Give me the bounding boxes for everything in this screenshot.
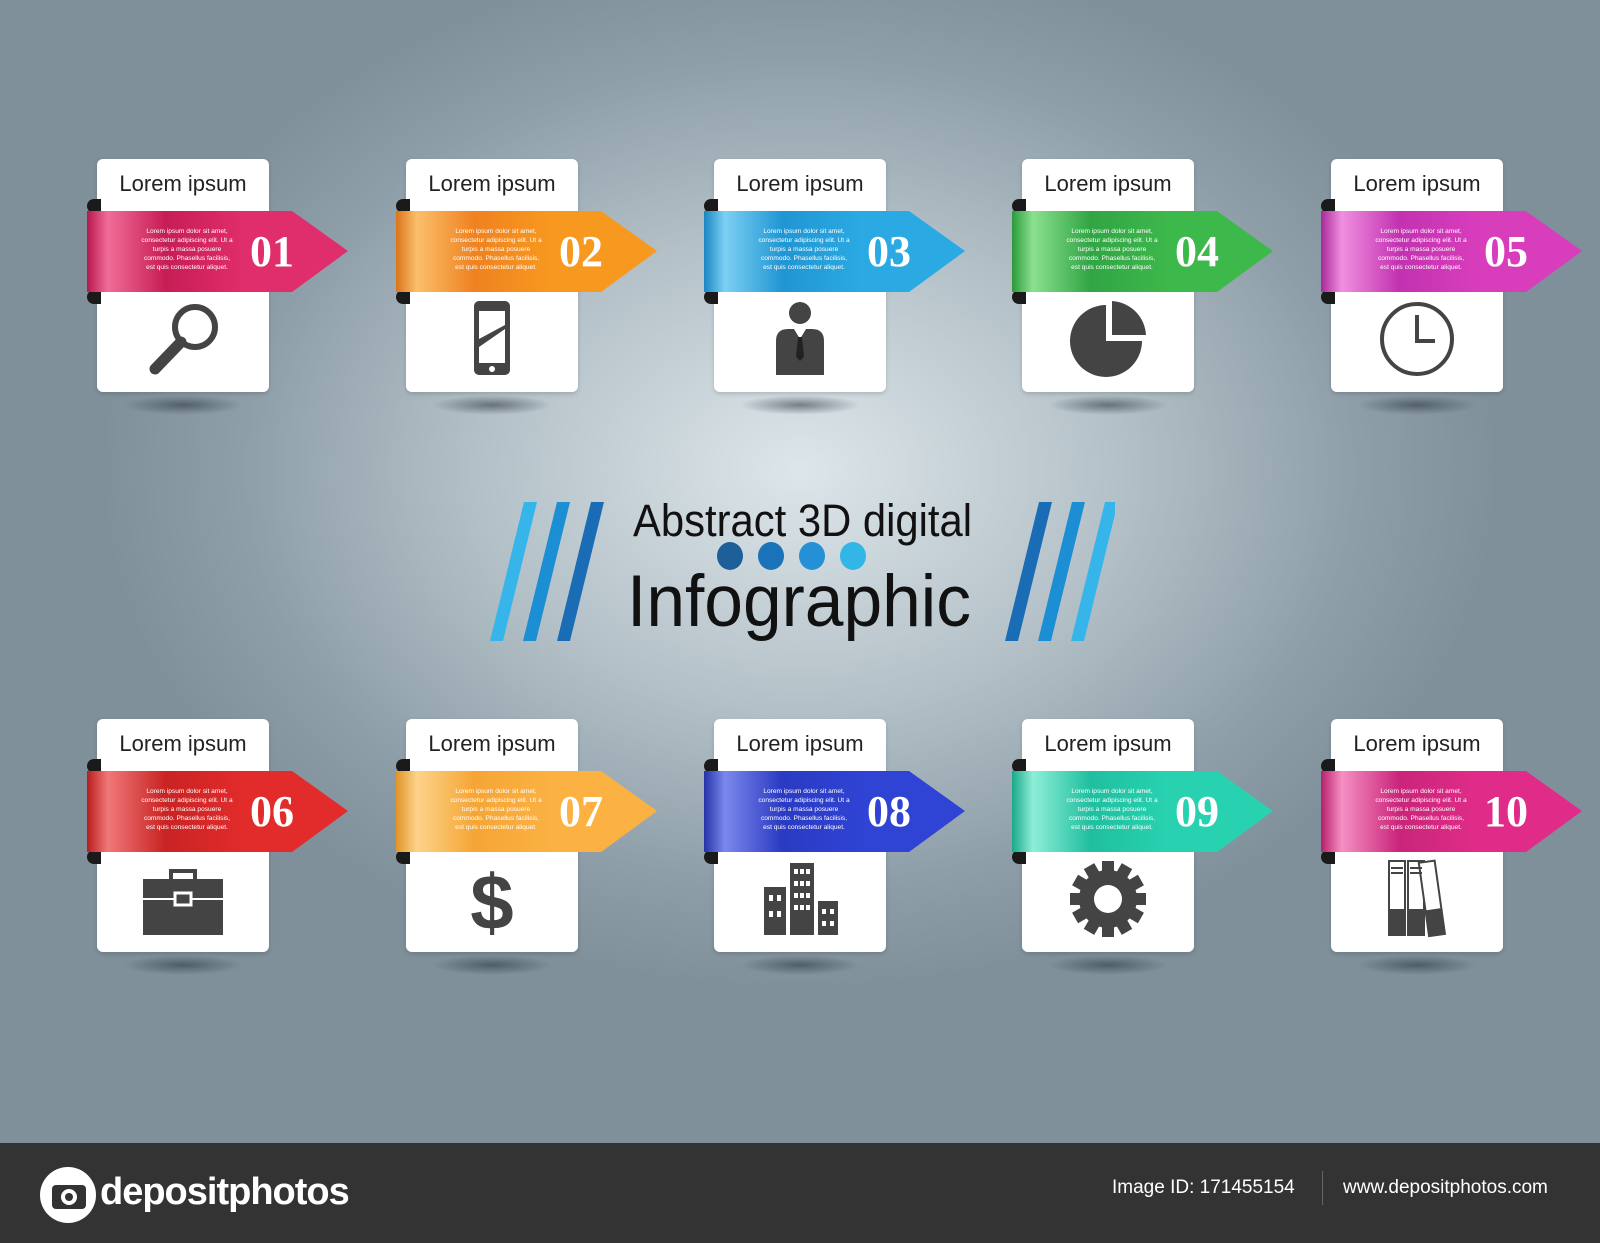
card 07: Lorem ipsum dolor sit amet, consectetur adipiscing elit. Ut a turpis a massa posuere commodo. Phasellus facilisis, est quis consectetur aliquet. — [450, 788, 542, 831]
icon: businessman — [776, 302, 824, 375]
card 03: 03 — [867, 227, 911, 276]
card 05: 05 — [1484, 227, 1528, 276]
url: www.depositphotos.com — [1343, 1177, 1548, 1198]
logo: depositphotos — [100, 1171, 349, 1213]
card 05: Lorem ipsum dolor sit amet, consectetur adipiscing elit. Ut a turpis a massa posuere commodo. Phasellus facilisis, est quis consectetur aliquet. — [1375, 228, 1467, 271]
icon: clock — [1380, 302, 1454, 376]
icon: binders — [1388, 860, 1446, 938]
card 04: Lorem ipsum — [1044, 171, 1172, 196]
image id: Image ID: 171455154 — [1112, 1177, 1295, 1198]
card 10: Lorem ipsum — [1353, 731, 1481, 756]
card 06 — [87, 719, 348, 974]
card 02: Lorem ipsum dolor sit amet, consectetur adipiscing elit. Ut a turpis a massa posuere commodo. Phasellus facilisis, est quis consectetur aliquet. — [450, 228, 542, 271]
left slashes — [490, 502, 604, 641]
card 09: Lorem ipsum — [1044, 731, 1172, 756]
card 10: 10 — [1484, 787, 1528, 836]
card 01: Lorem ipsum dolor sit amet, consectetur adipiscing elit. Ut a turpis a massa posuere commodo. Phasellus facilisis, est quis consectetur aliquet. — [141, 228, 233, 271]
right slashes — [1005, 502, 1118, 641]
card 10: Lorem ipsum dolor sit amet, consectetur adipiscing elit. Ut a turpis a massa posuere commodo. Phasellus facilisis, est quis consectetur aliquet. — [1375, 788, 1467, 831]
icon: gear — [1070, 861, 1146, 937]
card 04 — [1012, 159, 1273, 414]
card 01 — [87, 159, 348, 414]
card 04: 04 — [1175, 227, 1219, 276]
card 09: Lorem ipsum dolor sit amet, consectetur adipiscing elit. Ut a turpis a massa posuere commodo. Phasellus facilisis, est quis consectetur aliquet. — [1066, 788, 1158, 831]
card 07: 07 — [559, 787, 603, 836]
card 08: Lorem ipsum — [736, 731, 864, 756]
card 10 — [1321, 719, 1582, 974]
card 02: Lorem ipsum — [428, 171, 556, 196]
card 03: Lorem ipsum — [736, 171, 864, 196]
icon: briefcase — [143, 869, 223, 935]
card 06: 06 — [250, 787, 294, 836]
card 08 — [704, 719, 965, 974]
card 02: 02 — [559, 227, 603, 276]
card 07: Lorem ipsum — [428, 731, 556, 756]
footer bar — [0, 1143, 1600, 1243]
card 05 — [1321, 159, 1582, 414]
icon: phone — [474, 301, 510, 375]
card 01: 01 — [250, 227, 294, 276]
heading line 1: Abstract 3D digital — [633, 495, 972, 546]
card 09 — [1012, 719, 1273, 974]
title block — [490, 495, 1115, 642]
card 01: Lorem ipsum — [119, 171, 247, 196]
heading line 2: Infographic — [627, 561, 971, 642]
card 09: 09 — [1175, 787, 1219, 836]
card 08: Lorem ipsum dolor sit amet, consectetur adipiscing elit. Ut a turpis a massa posuere commodo. Phasellus facilisis, est quis consectetur aliquet. — [758, 788, 850, 831]
card 03: Lorem ipsum dolor sit amet, consectetur adipiscing elit. Ut a turpis a massa posuere commodo. Phasellus facilisis, est quis consectetur aliquet. — [758, 228, 850, 271]
card 07 — [396, 719, 657, 974]
icon: magnifier — [150, 304, 218, 374]
logo — [40, 1167, 349, 1223]
card 02 — [396, 159, 657, 414]
card 05: Lorem ipsum — [1353, 171, 1481, 196]
icon: buildings — [764, 863, 838, 935]
dots — [717, 542, 866, 570]
card 08: 08 — [867, 787, 911, 836]
card 04: Lorem ipsum dolor sit amet, consectetur adipiscing elit. Ut a turpis a massa posuere commodo. Phasellus facilisis, est quis consectetur aliquet. — [1066, 228, 1158, 271]
icon: pie chart — [1070, 301, 1146, 377]
card 06: Lorem ipsum dolor sit amet, consectetur adipiscing elit. Ut a turpis a massa posuere commodo. Phasellus facilisis, est quis consectetur aliquet. — [141, 788, 233, 831]
card 06: Lorem ipsum — [119, 731, 247, 756]
card 03 — [704, 159, 965, 414]
